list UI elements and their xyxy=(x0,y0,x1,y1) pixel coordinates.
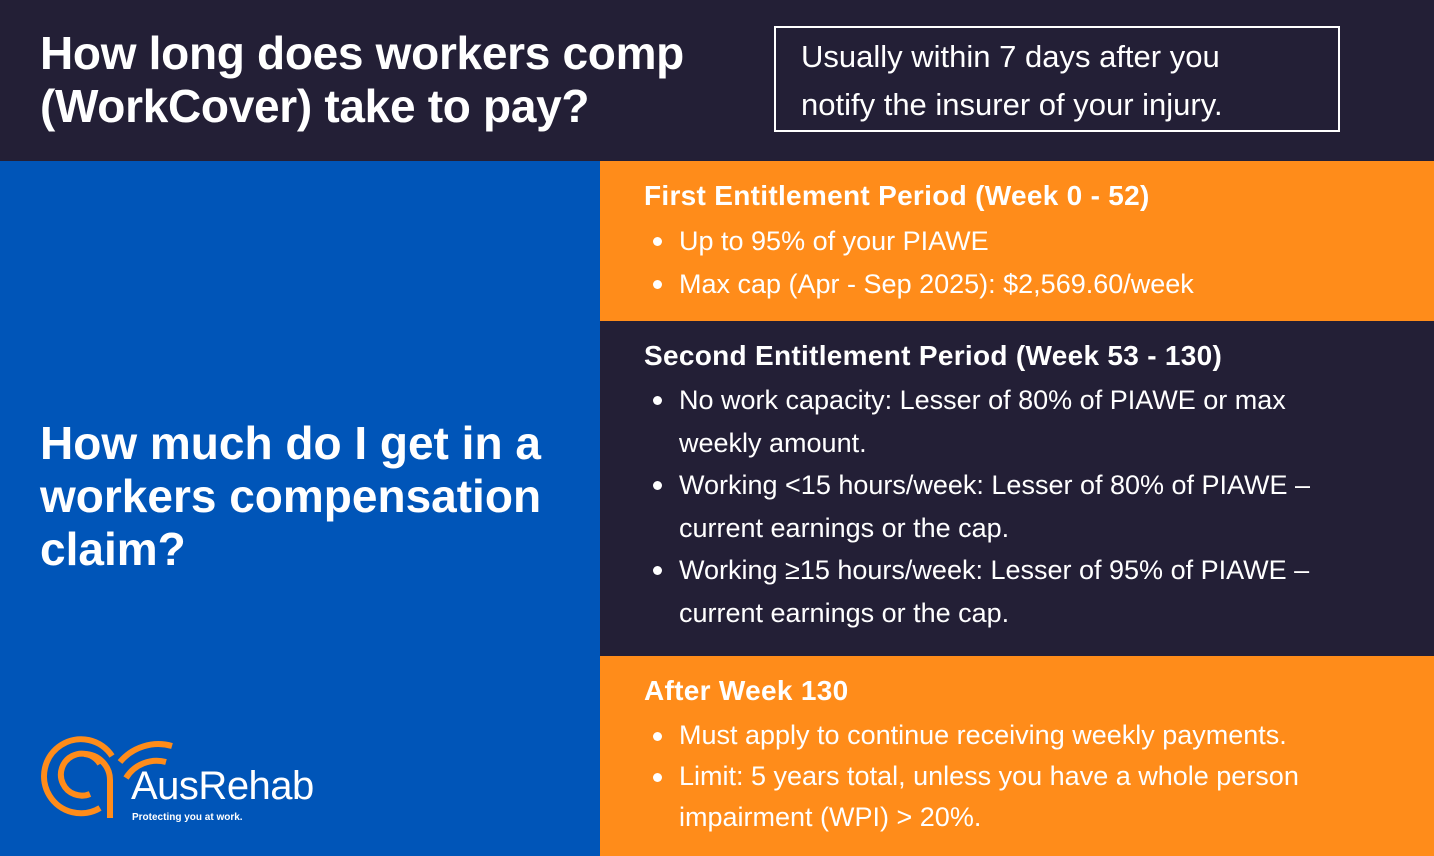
bullets xyxy=(653,720,1299,832)
answer box: Usually within 7 days after you notify the insurer of your injury. xyxy=(801,39,1223,122)
question heading: How much do I get in a workers compensation claim? xyxy=(40,417,541,575)
bullets: No work capacity: Lesser of 80% of PIAWE or max weekly amount. xyxy=(679,385,1286,458)
panel: second entitlement xyxy=(600,321,1434,656)
bullets: Working <15 hours/week: Lesser of 80% of PIAWE – current earnings or the cap. xyxy=(679,470,1310,542)
heading: After Week 130 xyxy=(644,675,848,706)
logo xyxy=(41,736,314,823)
panel: after week 130 xyxy=(600,656,1434,856)
logo: Protecting you at work. xyxy=(132,812,243,823)
bullets: Limit: 5 years total, unless you have a whole person impairment (WPI) > 20%. xyxy=(679,761,1299,832)
title: How long does workers comp (WorkCover) take to pay? xyxy=(40,27,684,132)
heading: Second Entitlement Period (Week 53 - 130) xyxy=(644,340,1222,371)
bullets: Must apply to continue receiving weekly payments. xyxy=(679,720,1287,750)
heading: First Entitlement Period (Week 0 - 52) xyxy=(644,180,1150,211)
bullets: Working ≥15 hours/week: Lesser of 95% of PIAWE – current earnings or the cap. xyxy=(679,555,1309,628)
bullets: Up to 95% of your PIAWE xyxy=(679,226,989,256)
bullets: Max cap (Apr - Sep 2025): $2,569.60/week xyxy=(679,269,1194,299)
bullets xyxy=(653,226,1194,299)
bullets xyxy=(653,385,1310,628)
answer box xyxy=(774,26,1340,132)
header xyxy=(0,0,1434,161)
logo text: AusRehab xyxy=(131,764,314,808)
panel: first entitlement xyxy=(600,161,1434,321)
panel: left blue xyxy=(0,161,600,856)
